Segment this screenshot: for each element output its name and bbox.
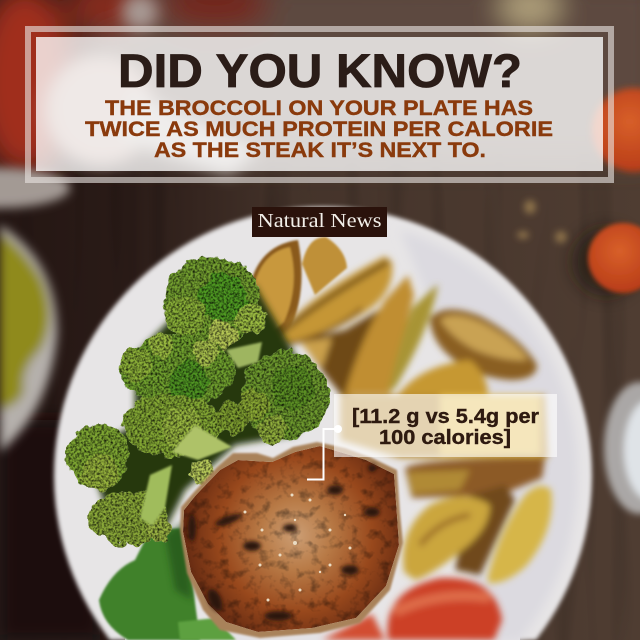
steak (180, 442, 403, 638)
background bowl left (0, 225, 57, 452)
potato wedges near the broccoli (250, 237, 347, 345)
steak char marks (188, 464, 380, 621)
lettuce (99, 520, 236, 640)
broccoli shadow (85, 285, 318, 530)
background dish right (604, 382, 640, 514)
title panel (28, 29, 611, 180)
broccoli florets (66, 256, 329, 545)
potato wedges, blurred (272, 256, 552, 583)
subheading text: TWICE AS MUCH PROTEIN PER CALORIE (85, 117, 553, 141)
steak seared surface (183, 446, 399, 632)
steak rim (180, 442, 403, 638)
broccoli stems (140, 342, 262, 526)
callout leader line (307, 425, 342, 480)
callout box: [11.2 g vs 5.4g per (352, 406, 539, 428)
source badge: Natural News (252, 207, 387, 237)
subheading text (85, 96, 553, 162)
plate (54, 207, 592, 640)
heading: did you know: DID YOU KNOW? (118, 44, 522, 97)
steak seasoning flecks (244, 494, 352, 602)
callout box (334, 394, 557, 457)
background tomato top right (592, 88, 640, 172)
background: blurred objects at top (0, 0, 640, 208)
broccoli (66, 256, 329, 545)
tomato slices on plate (322, 578, 502, 640)
callout box: 100 calories] (379, 427, 511, 449)
subheading text: THE BROCCOLI ON YOUR PLATE HAS (105, 96, 533, 120)
source badge: Natural News: Natural News (258, 210, 382, 232)
subheading text: AS THE STEAK IT’S NEXT TO. (154, 138, 486, 162)
background tomato right (572, 223, 640, 296)
